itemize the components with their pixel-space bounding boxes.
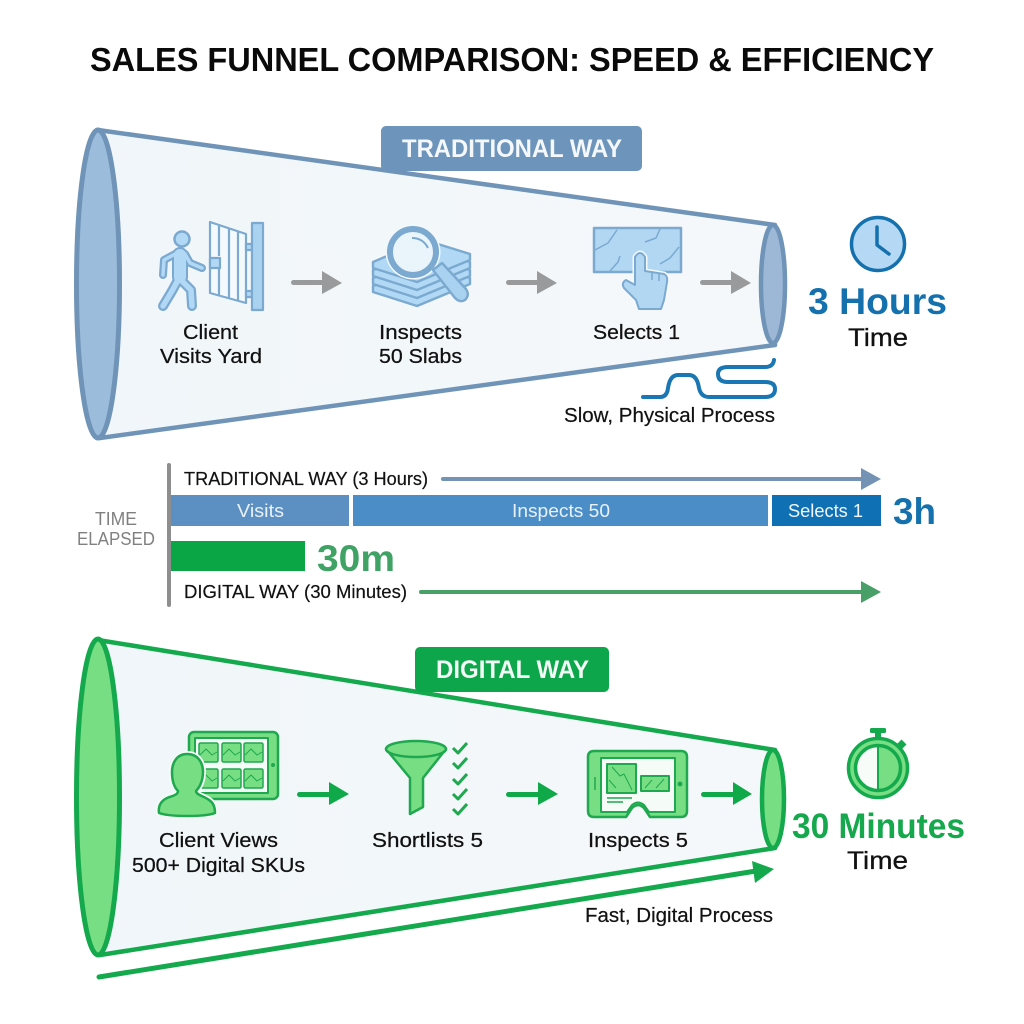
label: shortlists 5: Shortlists 5: [372, 830, 483, 852]
label: client visits yard: Client: [183, 322, 238, 344]
axis label: time elapsed: TIME: [95, 509, 137, 529]
badge: digital way: [415, 647, 609, 692]
funnel mouth: digital left: [76, 639, 120, 955]
icon: clock: [852, 218, 904, 270]
label: client views 500+ digital SKUs: 500+ Digital SKUs: [132, 855, 305, 877]
label: digital way 30 minutes: DIGITAL WAY (30 Minutes): [184, 581, 407, 602]
icon: winding path: [643, 360, 775, 397]
icon: client with tablet of SKUs: [159, 732, 278, 816]
axis label: time elapsed: [77, 509, 155, 549]
arrow: digital step 3 to exit: [701, 782, 752, 805]
bar segment: inspects 50: Inspects 50: [512, 500, 610, 521]
arrow: digital step 2 to step 3: [506, 782, 558, 805]
timeline axis: [167, 463, 171, 607]
arrow: fast diagonal: [99, 861, 774, 977]
arrow: step 2 to step 3: [506, 271, 557, 294]
stat: 3 hours: 3 Hours: [808, 281, 947, 322]
funnel body: traditional: [98, 130, 775, 438]
bar: digital 30 minutes: [171, 541, 305, 571]
icon: magnifier over slabs: [373, 224, 470, 306]
label: inspects 50 slabs: Inspects: [379, 322, 462, 344]
icon: VR tablet inspection: [588, 751, 687, 817]
chart: time elapsed timeline: [77, 463, 936, 607]
stat: 30 minutes: 30 Minutes: [792, 807, 965, 846]
label: inspects 5: Inspects 5: [588, 830, 688, 852]
label: traditional way 3 hours: TRADITIONAL WAY (3 Hours): [184, 468, 428, 489]
caption: fast digital process: Fast, Digital Process: [585, 905, 773, 927]
stat label: time: Time: [848, 324, 908, 352]
bar segment: visits: Visits: [237, 501, 284, 521]
arrow: step 3 to exit: [700, 271, 751, 294]
label: inspects 50 slabs: [379, 322, 462, 368]
value: 30m: 30m: [317, 538, 395, 579]
icon: hand selecting slab: [594, 228, 681, 309]
label: client visits yard: Visits Yard: [160, 346, 262, 368]
icon: funnel with checklist: [386, 741, 467, 814]
arrow: traditional timeline: [441, 468, 881, 490]
stat label: time: Time: [847, 847, 908, 875]
title: SALES FUNNEL COMPARISON: SPEED & EFFICIENCY: [90, 42, 934, 79]
arrow: step 1 to step 2: [291, 271, 342, 294]
panel: traditional way funnel: [76, 126, 785, 438]
label: client views 500+ digital SKUs: [132, 830, 305, 877]
label: inspects 50 slabs: 50 Slabs: [379, 346, 462, 368]
bar segment: selects 1: Selects 1: [788, 501, 863, 521]
panel: digital way funnel: [76, 639, 784, 955]
label: client visits yard: [160, 322, 262, 368]
funnel exit: traditional right: [761, 225, 785, 343]
funnel mouth: traditional left: [76, 130, 120, 438]
label: selects 1: Selects 1: [593, 322, 680, 344]
funnel exit: digital right: [762, 750, 784, 848]
bar segment: selects 1: [772, 495, 881, 526]
badge: traditional way: [381, 126, 642, 171]
caption: slow physical process: Slow, Physical Process: [564, 405, 775, 427]
axis label: time elapsed: ELAPSED: [77, 529, 155, 549]
bar segment: inspects 50: [353, 495, 768, 526]
badge: digital way: DIGITAL WAY: [436, 656, 589, 684]
icon: person walking to gate: [163, 222, 263, 310]
label: client views 500+ digital SKUs: Client Views: [159, 830, 278, 852]
icon: stopwatch: [848, 728, 908, 798]
value: 3h: 3h: [893, 491, 936, 532]
bar segment: visits: [171, 495, 349, 526]
arrow: digital timeline: [419, 581, 881, 603]
badge: traditional way: TRADITIONAL WAY: [402, 135, 622, 163]
funnel body: digital: [98, 640, 775, 955]
arrow: digital step 1 to step 2: [297, 782, 349, 805]
